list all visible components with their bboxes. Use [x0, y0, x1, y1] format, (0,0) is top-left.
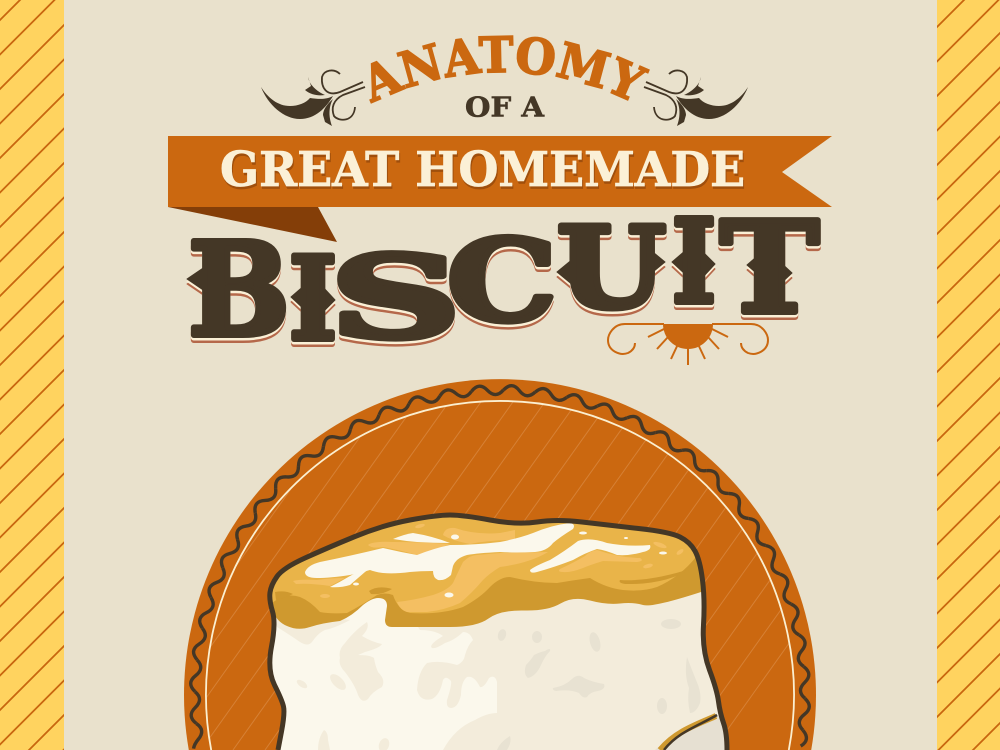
- medallion stripes: [206, 402, 788, 750]
- crust golden top: [272, 518, 696, 614]
- crust light glaze: [293, 523, 684, 612]
- title: biscuit shadow: U: [557, 209, 666, 339]
- biscuit outline: [270, 515, 727, 750]
- title: biscuit highlight: B: [188, 218, 290, 368]
- right striped band: [937, 0, 1000, 750]
- title: biscuit shadow: S: [330, 236, 461, 369]
- title: biscuit: B: [188, 215, 290, 366]
- title: biscuit highlight: U: [557, 206, 666, 336]
- crust base: [272, 558, 702, 629]
- title: biscuit highlight: C: [447, 218, 557, 350]
- title: biscuit: C: [447, 216, 557, 347]
- title: biscuit highlight: I: [289, 234, 337, 368]
- heading: Anatomy: ANATOMY: [369, 35, 650, 104]
- medallion circle: [184, 379, 816, 750]
- banner text: great homemade: GREAT HOMEMADE: [220, 142, 745, 198]
- title: biscuit: U: [557, 204, 666, 334]
- left striped band: [0, 0, 64, 750]
- title: biscuit: S: [330, 231, 461, 364]
- title: biscuit highlight: T: [720, 196, 819, 344]
- title: biscuit shadow: B: [188, 220, 290, 371]
- biscuit body: [272, 598, 497, 750]
- heading: of a: OF A: [465, 92, 545, 124]
- biscuit shaded crumb: [417, 592, 718, 750]
- ribbon fold: [168, 207, 337, 242]
- medallion inner ring: [206, 401, 794, 750]
- banner text: great homemade: GREAT HOMEMADE: [221, 144, 746, 200]
- title: biscuit: I: [289, 232, 337, 366]
- flourish: right: [644, 70, 748, 126]
- title: biscuit shadow: I: [289, 237, 337, 371]
- title: biscuit highlight: S: [330, 234, 461, 366]
- title: biscuit shadow: C: [447, 221, 557, 352]
- butter highlights: [305, 523, 667, 598]
- crumb texture: [276, 618, 390, 750]
- flourish: left: [261, 70, 365, 126]
- title: biscuit shadow: T: [720, 199, 819, 347]
- icon: sun ornament: [608, 324, 768, 365]
- ribbon banner: [168, 136, 832, 207]
- title: biscuit shadow: I: [672, 200, 716, 335]
- lower biscuit layer: [655, 715, 730, 750]
- title: biscuit shadow: [187, 199, 819, 371]
- shaded crumb texture: [497, 619, 700, 750]
- lower crust line: [660, 716, 716, 750]
- title: biscuit: T: [720, 194, 819, 342]
- medallion wavy border: [177, 373, 812, 750]
- title: biscuit highlight: I: [672, 198, 716, 332]
- crust dark streaks: [275, 572, 682, 600]
- biscuit illustration: [262, 510, 730, 750]
- title: biscuit highlight: [187, 196, 819, 368]
- title: biscuit: I: [672, 195, 716, 330]
- title: biscuit: [187, 194, 819, 366]
